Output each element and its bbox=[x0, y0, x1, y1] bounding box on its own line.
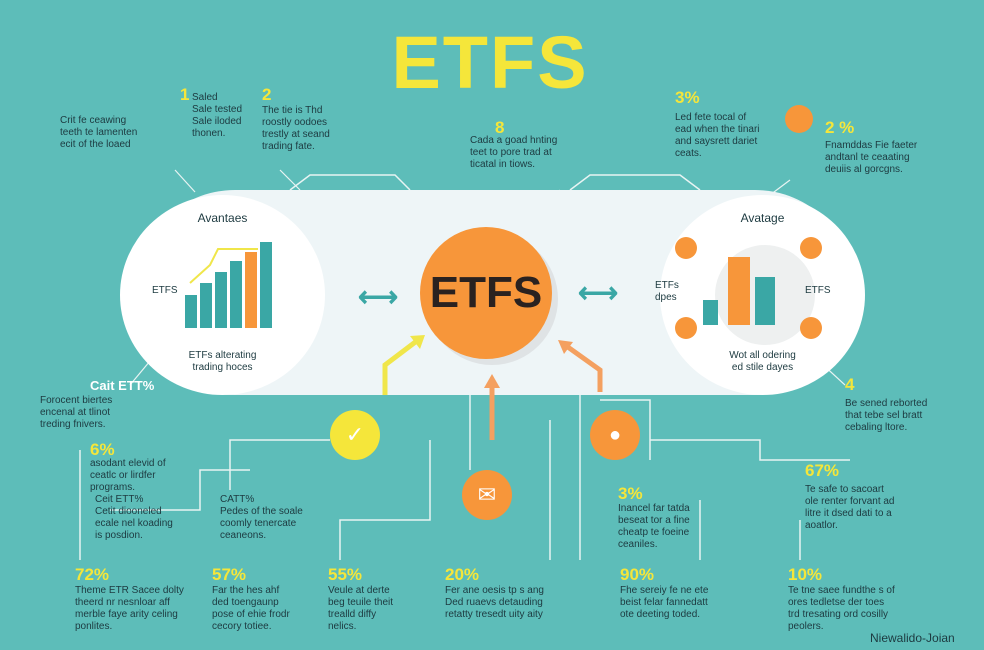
text: litre it dsed dati to a bbox=[805, 508, 892, 519]
text: Far the hes ahf bbox=[212, 585, 279, 596]
text: 67% bbox=[805, 461, 839, 480]
text: teet to pore trad at bbox=[470, 147, 552, 158]
bottom stats: Theme ETR Sacee dolty bbox=[75, 585, 184, 596]
text: programs. bbox=[90, 482, 135, 493]
text: Te tne saee fundthe s of bbox=[788, 585, 895, 596]
text: ote deeting toded. bbox=[620, 609, 700, 620]
text: is posdion. bbox=[95, 530, 143, 541]
text: ceats. bbox=[675, 148, 702, 159]
side callouts: Cait ETT% bbox=[90, 378, 154, 393]
text: ⟷ bbox=[578, 277, 618, 308]
text: ceaneons. bbox=[220, 530, 266, 541]
text: thonen. bbox=[192, 128, 225, 139]
text: deuiis al gorcgns. bbox=[825, 164, 903, 175]
text: encenal at tlinot bbox=[40, 407, 110, 418]
text: trading fate. bbox=[262, 141, 315, 152]
panel: right advantage circle: ETFs bbox=[655, 280, 679, 291]
text: 2 bbox=[262, 85, 271, 104]
panel: right advantage circle: dpes bbox=[655, 292, 677, 303]
title: ETFS bbox=[391, 21, 589, 104]
text: 3% bbox=[675, 88, 700, 107]
text: peolers. bbox=[788, 621, 824, 632]
text: trd tresating ord cosilly bbox=[788, 609, 888, 620]
top callouts: Crit fe ceawing bbox=[60, 115, 126, 126]
text: Be sened reborted bbox=[845, 398, 927, 409]
panel: left advantages circle: Avantaes bbox=[198, 211, 247, 225]
text: ores tedletse der toes bbox=[788, 597, 884, 608]
icon: pin bbox=[590, 410, 640, 460]
text: Fnamddas Fie faeter bbox=[825, 140, 917, 151]
panel: right advantage circle: ed stile dayes bbox=[732, 362, 793, 373]
center ETFS circle: ETFS bbox=[430, 268, 542, 317]
text: trestly at seand bbox=[262, 129, 330, 140]
text: and saysrett dariet bbox=[675, 136, 757, 147]
text: 57% bbox=[212, 565, 246, 584]
text: cecory totiee. bbox=[212, 621, 271, 632]
icon: mail bbox=[462, 470, 512, 520]
text: 3% bbox=[618, 484, 643, 503]
bottom stats: merble faye arity celing bbox=[75, 609, 178, 620]
text: ticatal in tiows. bbox=[470, 159, 535, 170]
text: that tebe sel bratt bbox=[845, 410, 922, 421]
text: 10% bbox=[788, 565, 822, 584]
panel: left advantages circle: ETFS bbox=[152, 285, 178, 296]
text: Cetit diooneled bbox=[95, 506, 162, 517]
text: Sale tested bbox=[192, 104, 242, 115]
text: 2 % bbox=[825, 118, 854, 137]
bottom stats: theerd nr nesnloar aff bbox=[75, 597, 170, 608]
top callouts: 1 bbox=[180, 85, 189, 104]
top callouts: teeth te lamenten bbox=[60, 127, 137, 138]
text: beseat tor a fine bbox=[618, 515, 690, 526]
text: ceatlc or lirdfer bbox=[90, 470, 156, 481]
text: 8 bbox=[495, 118, 504, 137]
text: Cada a goad hnting bbox=[470, 135, 557, 146]
bottom stats: 72% bbox=[75, 565, 109, 584]
text: 20% bbox=[445, 565, 479, 584]
text: 6% bbox=[90, 440, 115, 459]
panel: right advantage circle: Wot all odering bbox=[729, 350, 796, 361]
text: pose of ehie frodr bbox=[212, 609, 290, 620]
icon: shield bbox=[330, 410, 380, 460]
text: ecale nel koading bbox=[95, 518, 173, 529]
top callouts bbox=[60, 85, 189, 150]
text: Forocent biertes bbox=[40, 395, 112, 406]
text: cebaling ltore. bbox=[845, 422, 907, 433]
text: nelics. bbox=[328, 621, 356, 632]
text: The tie is Thd bbox=[262, 105, 322, 116]
center ETFS circle bbox=[420, 227, 552, 359]
text: ole renter forvant ad bbox=[805, 496, 894, 507]
text: retatty tresedt uity aity bbox=[445, 609, 543, 620]
text: Inancel far tatda bbox=[618, 503, 690, 514]
text: Veule at derte bbox=[328, 585, 390, 596]
text: asodant elevid of bbox=[90, 458, 166, 469]
text: Fer ane oesis tp s ang bbox=[445, 585, 544, 596]
main capsule panel bbox=[135, 190, 855, 395]
icon: shield: ✓ bbox=[346, 422, 364, 447]
text: Te safe to sacoart bbox=[805, 484, 884, 495]
text: 90% bbox=[620, 565, 654, 584]
panel: right advantage circle: Avatage bbox=[741, 211, 784, 225]
panel: left advantages circle bbox=[120, 195, 325, 395]
bar chart bbox=[185, 242, 272, 328]
text: coomly tenercate bbox=[220, 518, 296, 529]
text: Saled bbox=[192, 92, 218, 103]
text: Fhe sereiy fe ne ete bbox=[620, 585, 708, 596]
text: aoatlor. bbox=[805, 520, 838, 531]
text: Sale iloded bbox=[192, 116, 241, 127]
icon: pin: ● bbox=[609, 424, 621, 446]
panel: right advantage circle: ETFS bbox=[805, 285, 831, 296]
text: beist felar fannedatt bbox=[620, 597, 708, 608]
panel: left advantages circle: ETFs alterating bbox=[189, 350, 256, 361]
arrows: ⟷ bbox=[358, 281, 398, 312]
top callouts: ecit of the loaed bbox=[60, 139, 131, 150]
text: ponlites. bbox=[75, 621, 112, 632]
text: roostly oodoes bbox=[262, 117, 327, 128]
text: ded toengaunp bbox=[212, 597, 279, 608]
icon: grid bbox=[785, 105, 813, 133]
icon: mail: ✉ bbox=[478, 482, 496, 507]
text: Pedes of the soale bbox=[220, 506, 303, 517]
text: 55% bbox=[328, 565, 362, 584]
text: Ceit ETT% bbox=[95, 494, 143, 505]
text: Led fete tocal of bbox=[675, 112, 746, 123]
text: treding fnivers. bbox=[40, 419, 106, 430]
text: Ded ruaevs detauding bbox=[445, 597, 543, 608]
text: andtanl te ceaating bbox=[825, 152, 910, 163]
panel: right advantage circle bbox=[660, 195, 865, 395]
text: 4 bbox=[845, 375, 854, 394]
text: beg teuile theit bbox=[328, 597, 393, 608]
text: ead when the tinari bbox=[675, 124, 760, 135]
panel: left advantages circle: trading hoces bbox=[192, 362, 253, 373]
text: cheatp te foeine bbox=[618, 527, 689, 538]
text: CATT% bbox=[220, 494, 254, 505]
text: ceaniles. bbox=[618, 539, 657, 550]
watermark: Niewalido-Joian bbox=[870, 631, 955, 645]
text: trealld diffy bbox=[328, 609, 376, 620]
bottom stats bbox=[75, 565, 184, 632]
